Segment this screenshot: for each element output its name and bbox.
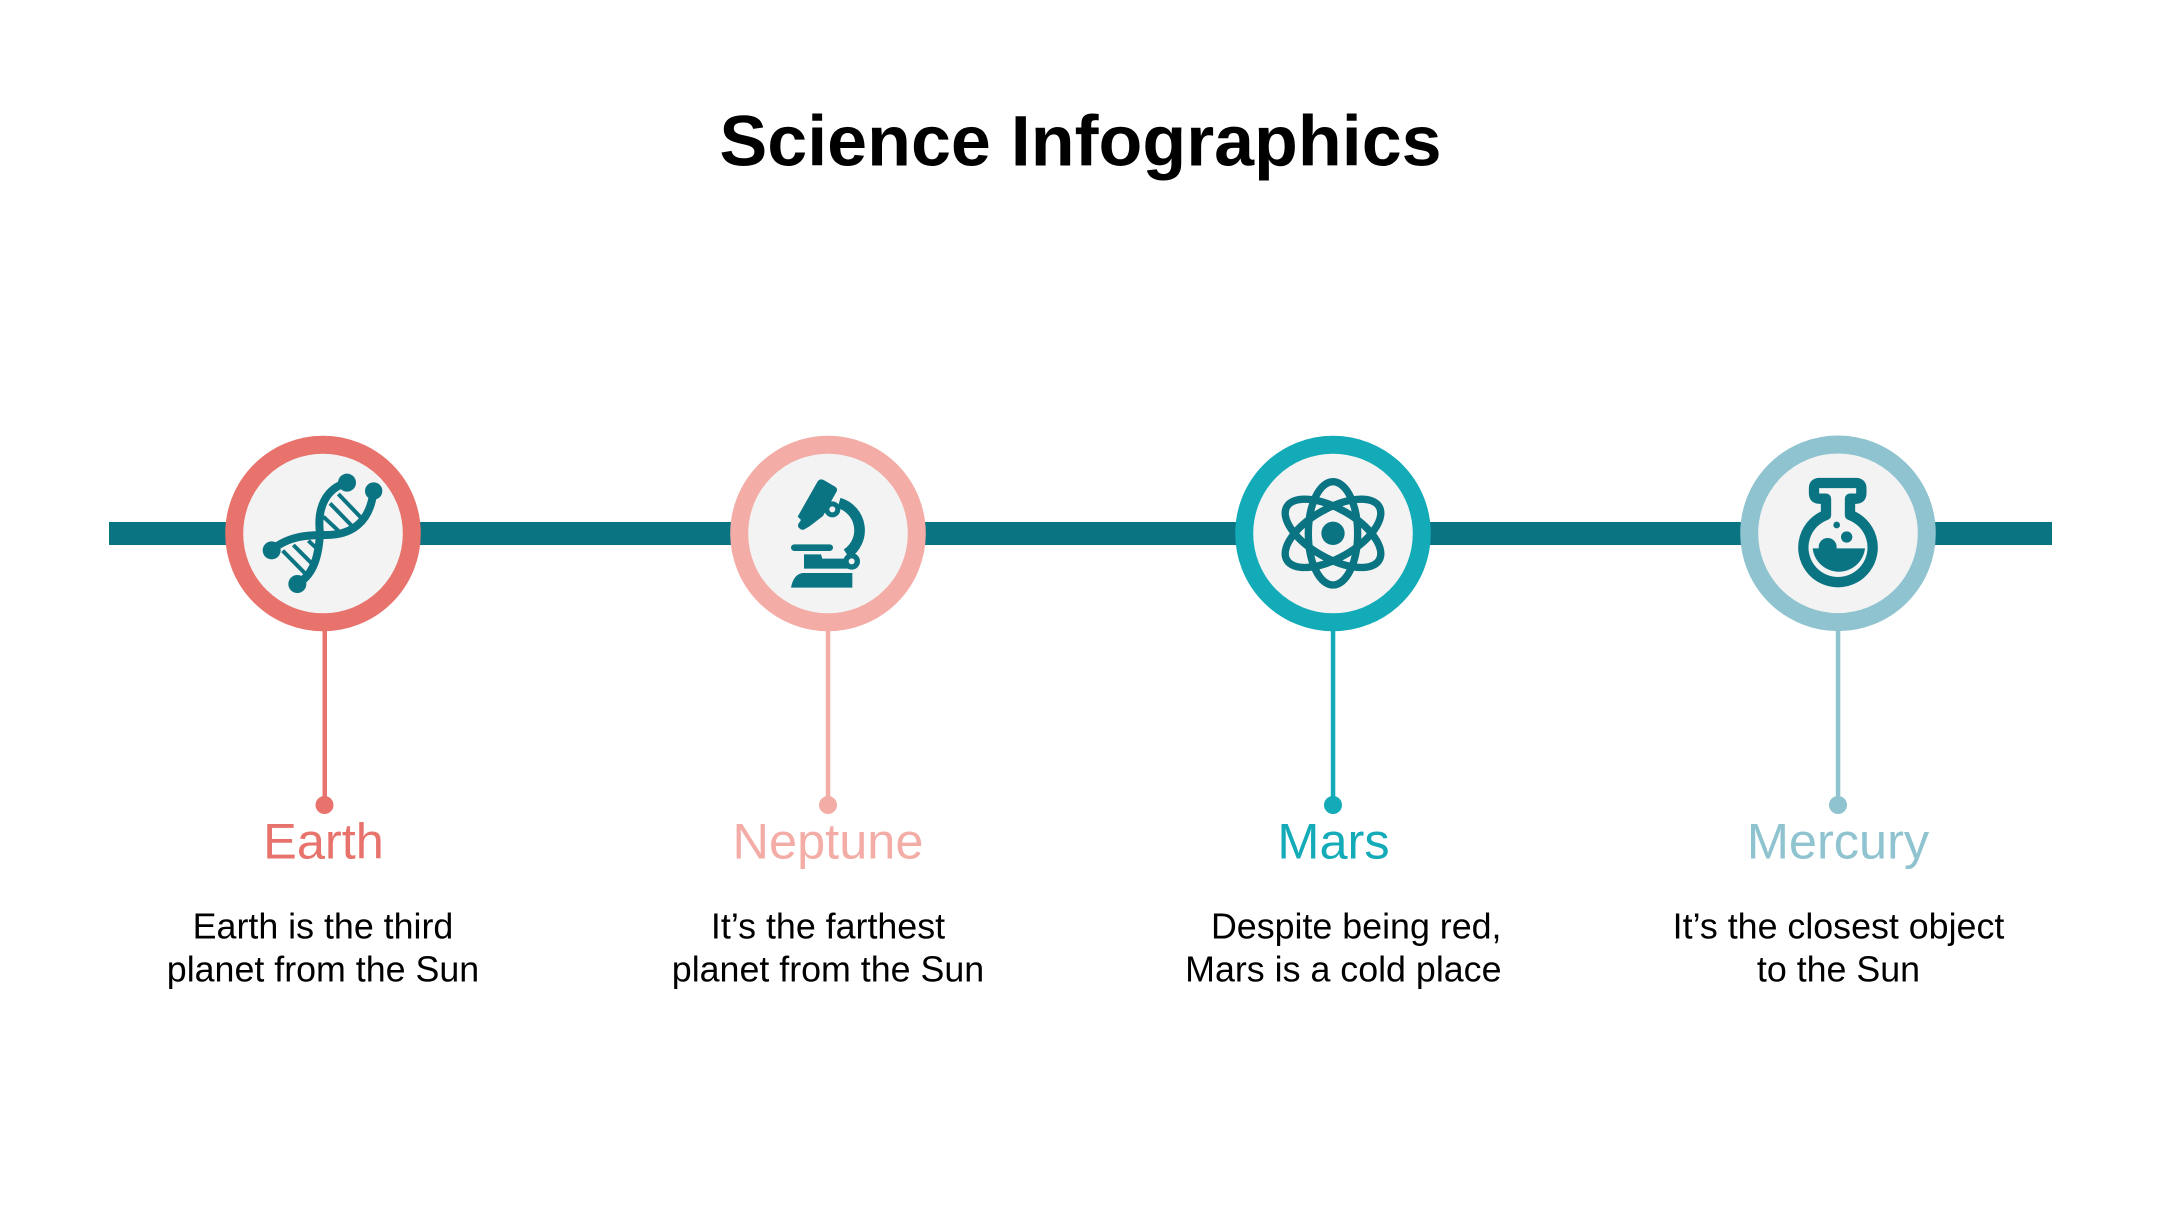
node ring: Mars [1244, 445, 1422, 622]
icon: DNA helix [263, 474, 382, 593]
description: Mars: Despite being red, [1211, 906, 1502, 946]
title: Science Infographics [719, 102, 1442, 182]
label: Mars: Mars [1277, 813, 1390, 870]
label: Neptune: Neptune [733, 813, 923, 870]
label: Earth: Earth [263, 813, 384, 870]
description: Mars: Mars is a cold place [1185, 950, 1502, 990]
connector: Earth [316, 625, 334, 814]
icon: flask [1803, 483, 1873, 582]
icon: microscope [791, 479, 860, 588]
step: Neptune [672, 445, 984, 990]
label: Mercury: Mercury [1747, 813, 1930, 870]
step: Mars [1185, 445, 1502, 990]
connector: Neptune [819, 625, 837, 814]
node ring: Neptune [739, 445, 917, 622]
description: Mercury: to the Sun [1757, 950, 1920, 990]
timeline bar [109, 522, 2052, 545]
step: Earth [167, 445, 479, 990]
description: Mercury: It’s the closest object [1673, 906, 2004, 946]
step: Mercury [1673, 444, 2004, 990]
node ring: Mercury [1749, 444, 1927, 622]
description: Neptune: planet from the Sun [672, 950, 984, 990]
connector: Mercury [1829, 625, 1847, 814]
node ring: Earth [234, 445, 412, 622]
description: Earth: Earth is the third [193, 906, 453, 946]
description: Earth: planet from the Sun [167, 950, 479, 990]
description: Neptune: It’s the farthest [711, 906, 945, 946]
connector: Mars [1324, 625, 1342, 814]
icon: atom [1274, 482, 1392, 585]
